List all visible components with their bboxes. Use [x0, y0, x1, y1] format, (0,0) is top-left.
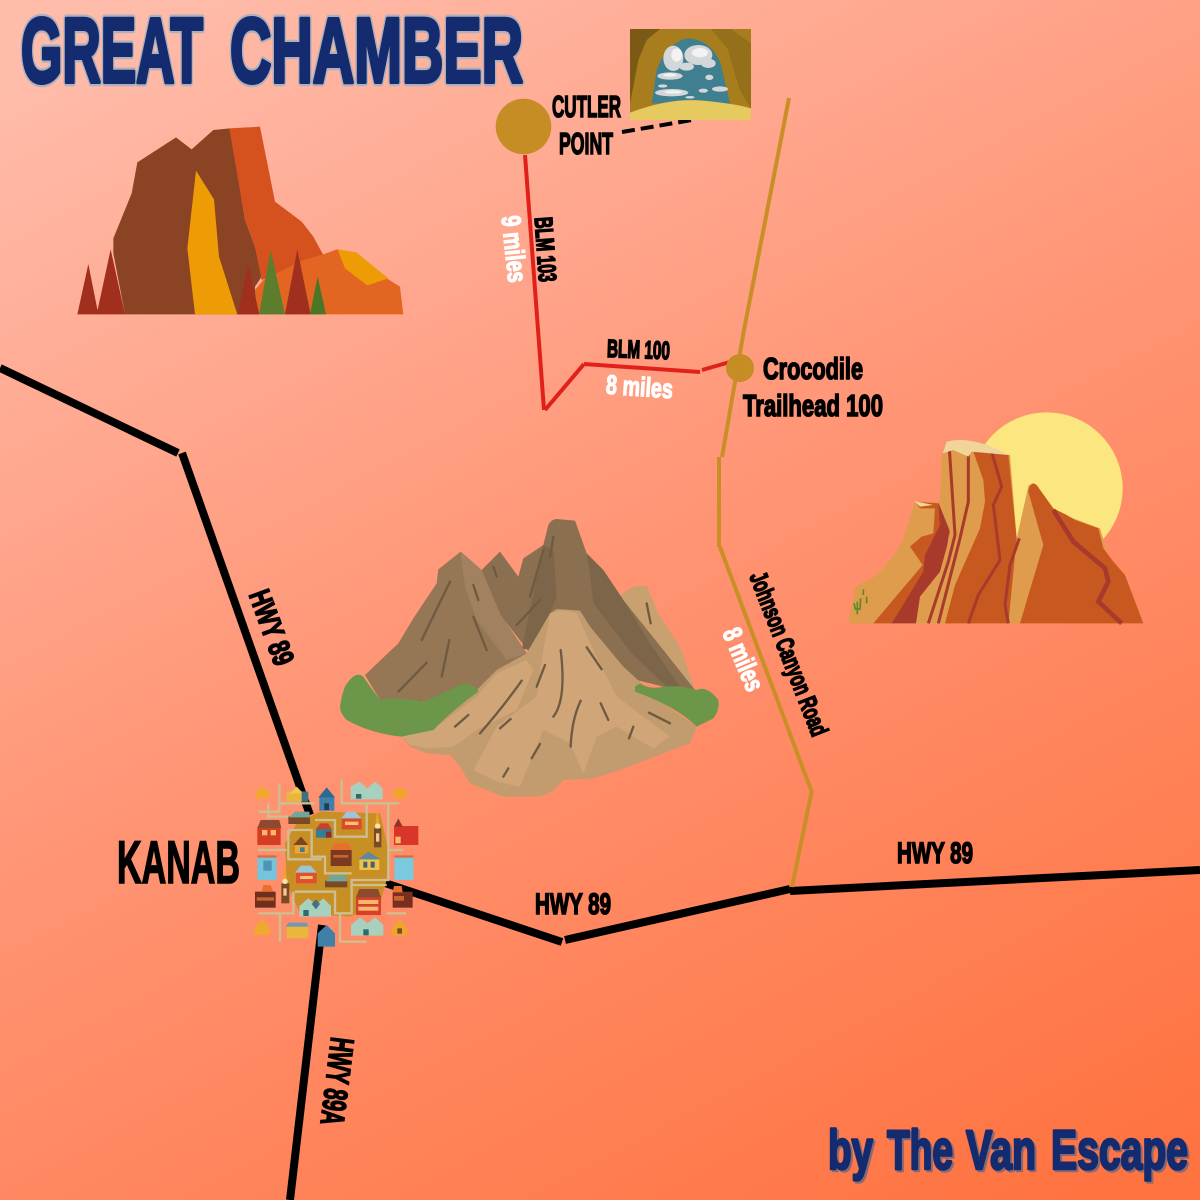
label: Crocodile Trailhead 100 — [743, 351, 883, 423]
title: GREAT — [21, 0, 203, 102]
credit — [828, 1118, 1190, 1183]
road: BLM 103 and BLM 100 — [525, 155, 730, 410]
label: Crocodile Trailhead 100: Trailhead 100 — [743, 388, 883, 423]
road: HWY 89 middle segment — [565, 889, 790, 940]
label: Cutler Point — [552, 89, 621, 161]
icon: central brown mountains — [340, 519, 719, 797]
photo: cave opening — [630, 29, 751, 120]
buildings — [254, 782, 418, 947]
icon: left red rock mountain — [77, 127, 403, 314]
road: HWY 89A — [290, 925, 322, 1200]
title: CHAMBER — [230, 0, 523, 102]
credit: The — [889, 1120, 955, 1183]
label: HWY 89 east: HWY 89 — [897, 837, 973, 870]
label: HWY 89 north-west: HWY 89 — [242, 585, 300, 670]
sun — [971, 412, 1123, 564]
road: HWY 89 into Kanab — [182, 453, 310, 815]
credit: Van — [966, 1118, 1036, 1181]
label: HWY 89 middle: HWY 89 — [535, 888, 611, 921]
road: HWY 89 east of Kanab — [385, 883, 562, 942]
label: Cutler Point: POINT — [559, 126, 613, 161]
label: Kanab: KANAB — [117, 829, 240, 896]
road: HWY 89 north-west — [0, 368, 178, 453]
title: CHAMBER — [230, 0, 523, 102]
label: HWY 89A: HWY 89A — [314, 1035, 361, 1127]
icon: mesa with sun — [848, 412, 1143, 623]
label: Cutler Point: CUTLER — [552, 89, 621, 124]
label: BLM 103: BLM 103 — [529, 216, 561, 283]
label: 9 miles: 9 miles — [496, 214, 532, 284]
label: Johnson Canyon Road: Johnson Canyon Road — [744, 568, 833, 740]
label: Crocodile Trailhead 100: Crocodile — [763, 351, 863, 386]
credit: Van — [968, 1120, 1038, 1183]
label: 8 miles on Johnson Canyon Road: 8 miles — [717, 623, 770, 696]
cactus — [854, 589, 867, 614]
label: 8 miles on BLM 100: 8 miles — [605, 370, 674, 404]
title: GREAT — [21, 0, 203, 102]
dashed connector to cave — [622, 120, 692, 132]
road: Johnson Canyon Road — [719, 98, 812, 887]
credit: by — [830, 1120, 875, 1183]
marker: Cutler Point — [496, 99, 551, 154]
icon: town of Kanab — [254, 779, 418, 947]
credit: The — [887, 1118, 953, 1181]
marker: Crocodile Trailhead — [726, 354, 754, 382]
title — [21, 0, 523, 102]
credit: by — [828, 1118, 873, 1181]
label: BLM 100: BLM 100 — [607, 335, 670, 365]
road: HWY 89 east — [790, 870, 1200, 891]
